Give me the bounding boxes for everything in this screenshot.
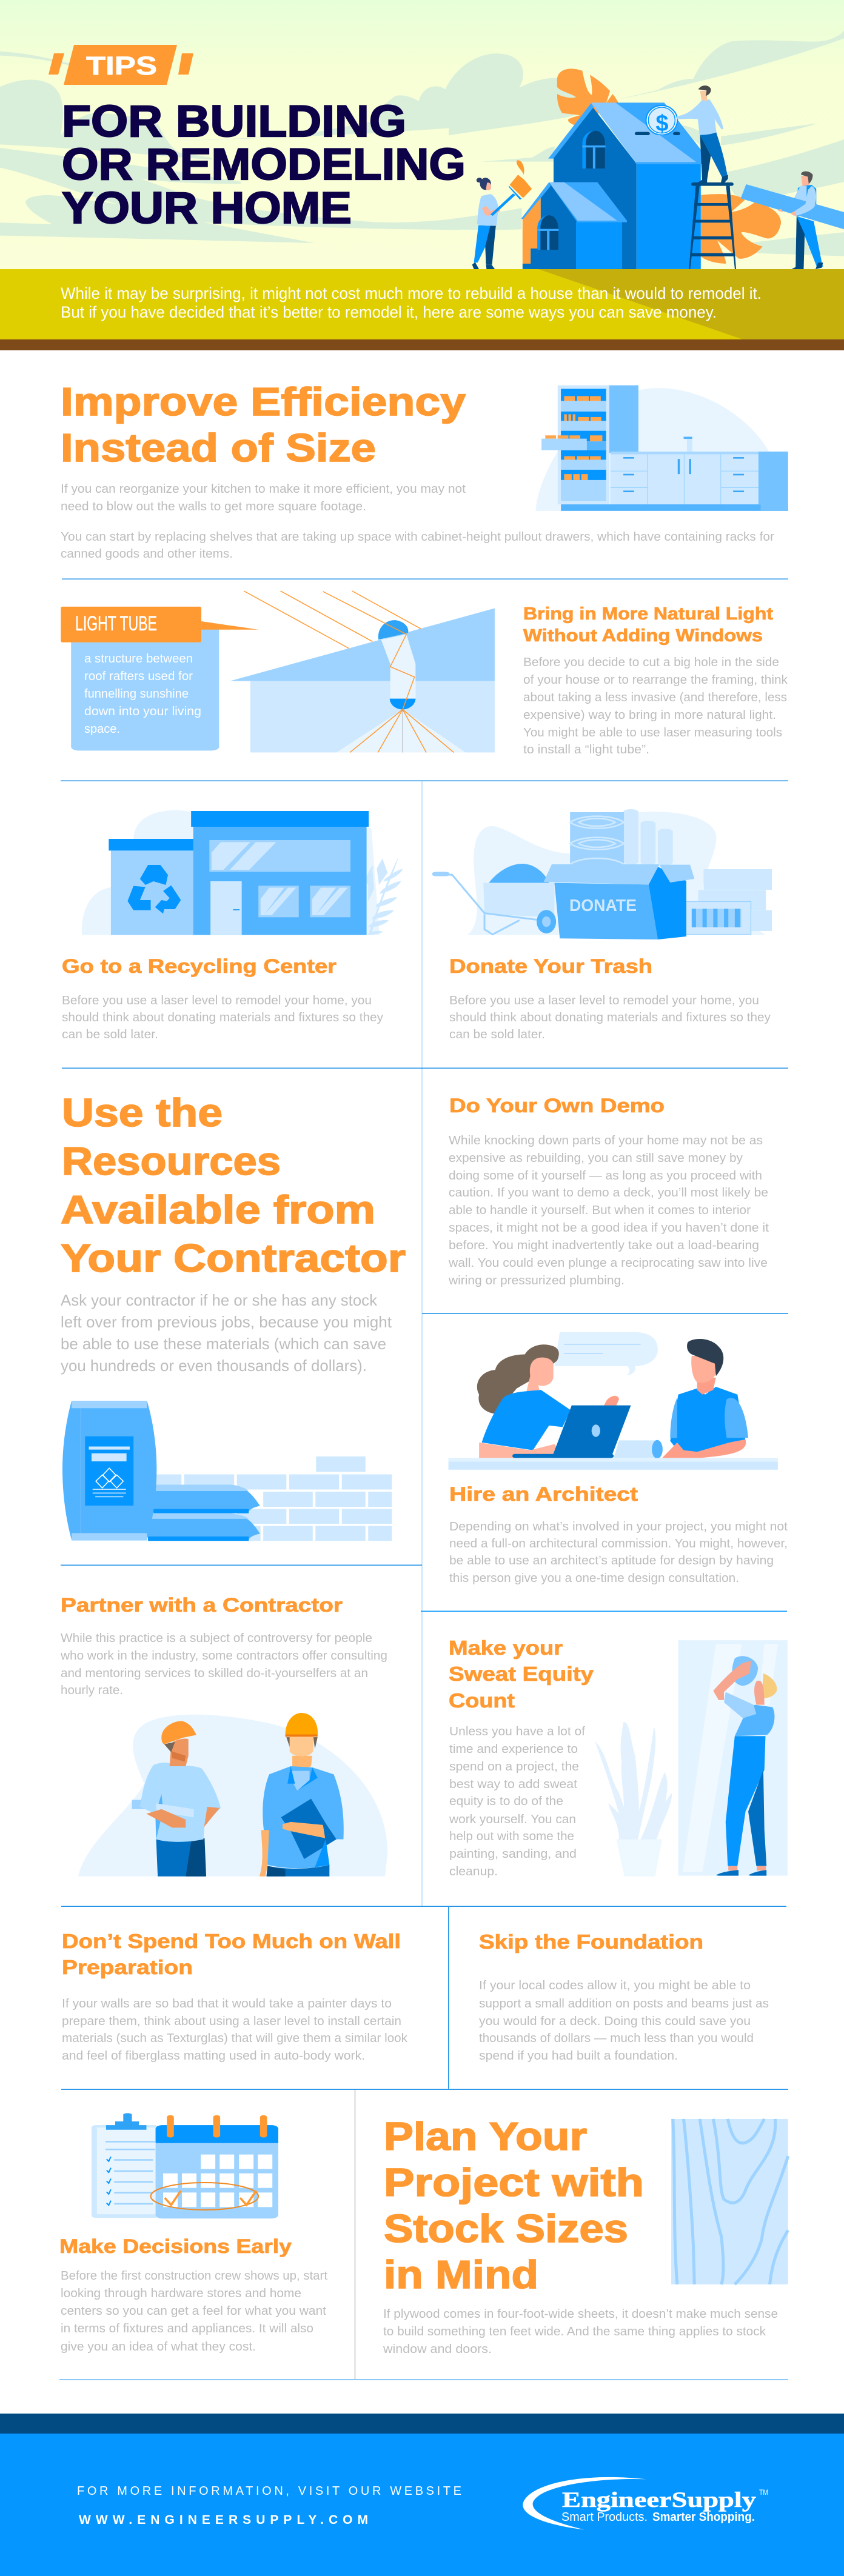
figure: man on ladder	[677, 85, 728, 182]
callout: light tube definition: LIGHT TUBE	[75, 612, 157, 635]
call to action text	[77, 2484, 461, 2527]
body text: wall. You could even plunge a reciprocating saw into live	[448, 1256, 768, 1270]
body text: need to blow out the walls to get more square footage.	[61, 500, 366, 513]
body text	[448, 1134, 769, 1287]
body text: need a full-on architectural commission. You might, however,	[449, 1537, 788, 1550]
panel: recycling center	[62, 810, 403, 1041]
logo: EngineerSupply	[523, 2477, 768, 2529]
callout: light tube definition: roof rafters used for	[84, 670, 193, 683]
intro text: While it may be surprising, it might not cost much more to rebuild a house than it would to remodel it.	[61, 284, 762, 302]
body text: you hundreds or even thousands of dollars).	[61, 1356, 367, 1375]
heading: Donate Your Trash	[449, 955, 652, 977]
heading	[523, 604, 773, 646]
body text	[61, 482, 774, 561]
illustration: kitchen	[535, 385, 788, 511]
body text: You can start by replacing shelves that are taking up space with cabinet-height pullout drawers, which have containing racks for	[61, 530, 774, 544]
body text	[523, 656, 788, 756]
body text	[449, 1725, 585, 1878]
heading: Hire an Architect	[449, 1483, 638, 1505]
heading: Make your	[449, 1637, 563, 1659]
icon: monstera leaves	[557, 68, 781, 264]
heading	[449, 1637, 594, 1712]
call to action text: WWW.ENGINEERSUPPLY.COM	[79, 2513, 368, 2527]
body text: spaces, it might not be a good idea if you haven’t done it	[449, 1221, 769, 1235]
body text: Ask your contractor if he or she has any stock	[61, 1291, 378, 1309]
intro text	[61, 284, 762, 321]
panel: light tube	[61, 591, 788, 756]
tips badge: TIPS	[86, 52, 157, 81]
body text: looking through hardware stores and home	[61, 2287, 301, 2300]
logo: EngineerSupply: Smart Products.	[561, 2511, 648, 2524]
panel: plan with stock sizes	[383, 2114, 788, 2356]
callout: light tube definition: a structure between	[84, 652, 193, 666]
heading	[61, 1090, 406, 1280]
body text: should think about donating materials and fixtures so they	[449, 1011, 771, 1024]
body text	[449, 1520, 788, 1585]
body text: can be sold later.	[449, 1028, 545, 1041]
figure: man carrying board	[740, 172, 844, 269]
body text: If you can reorganize your kitchen to make it more efficient, you may not	[61, 482, 466, 496]
body text: painting, sanding, and	[449, 1847, 577, 1861]
body text: can be sold later.	[62, 1028, 158, 1041]
heading: Available from	[61, 1187, 375, 1232]
body text: If your walls are so bad that it would take a painter days to	[62, 1997, 392, 2010]
panel: header	[0, 0, 844, 350]
logo: EngineerSupply: EngineerSupply	[562, 2488, 756, 2512]
heading: Go to a Recycling Center	[62, 955, 337, 977]
body text	[449, 994, 771, 1041]
heading: Instead of Size	[61, 425, 376, 470]
body text: centers so you can get a feel for what you want	[61, 2304, 326, 2318]
panel: sweat equity	[449, 1637, 788, 1878]
body text	[61, 1291, 392, 1375]
body text: help out with some the	[449, 1830, 574, 1843]
heading: Skip the Foundation	[479, 1930, 703, 1953]
body text: canned goods and other items.	[61, 547, 233, 561]
body text	[62, 994, 383, 1041]
body text: who work in the industry, some contractors offer consulting	[60, 1649, 387, 1663]
body text: be able to use an architect’s aptitude for design by having	[449, 1554, 774, 1567]
body text: work yourself. You can	[449, 1813, 576, 1826]
body text	[479, 1979, 769, 2063]
body text: If plywood comes in four-foot-wide sheets, it doesn’t make much sense	[383, 2307, 778, 2321]
title: FOR BUILDING	[62, 97, 406, 146]
logo: EngineerSupply: Smarter Shopping.	[652, 2511, 755, 2524]
panel: hire an architect	[449, 1332, 788, 1585]
heading: Bring in More Natural Light	[523, 604, 773, 624]
body text: be able to use these materials (which can save	[61, 1335, 386, 1353]
illustration: recycling building	[82, 810, 403, 935]
callout: light tube definition: down into your living	[84, 705, 201, 718]
body text: you would for a deck. Doing this could save you	[479, 2015, 751, 2028]
body text: spend if you had built a foundation.	[479, 2049, 678, 2063]
title	[62, 97, 466, 233]
heading: Count	[449, 1689, 515, 1712]
body text: If your local codes allow it, you might be able to	[479, 1979, 751, 1992]
panel: skip the foundation	[479, 1930, 769, 2063]
callout: light tube definition: space.	[84, 722, 120, 736]
heading	[62, 1930, 401, 1978]
body text: expensive) way to bring in more natural light.	[523, 709, 776, 722]
illustration: plant and woman painting	[595, 1640, 788, 1877]
body text: spend on a project, the	[449, 1760, 579, 1774]
body text: support a small addition on posts and beams just as	[479, 1997, 769, 2010]
heading	[61, 379, 466, 470]
body text: Depending on what’s involved in your project, you might not	[449, 1520, 788, 1533]
panel: wall preparation	[62, 1930, 408, 2063]
body text: able to handle it yourself. But when it comes to interior	[449, 1204, 751, 1217]
heading: in Mind	[384, 2252, 538, 2297]
body text	[60, 1632, 387, 1697]
heading: Make Decisions Early	[59, 2235, 292, 2257]
heading: Improve Efficiency	[61, 379, 466, 424]
body text: While knocking down parts of your home may not be as	[449, 1134, 763, 1147]
body text: about taking a less invasive (and therefore, less	[523, 691, 787, 704]
body text: and feel of fiberglass matting used in auto-body work.	[62, 2049, 365, 2063]
body text: materials (such as Texturglas) that will give them a similar look	[62, 2032, 408, 2045]
body text: thousands of dollars — much less than you would	[479, 2032, 754, 2045]
logo: EngineerSupply: TM	[759, 2488, 768, 2497]
body text: cleanup.	[449, 1865, 498, 1878]
illustration: materials and bricks	[62, 1401, 392, 1541]
panel: do your own demo	[448, 1095, 769, 1287]
heading: Do Your Own Demo	[449, 1095, 665, 1116]
body text: in terms of fixtures and appliances. It will also	[61, 2322, 313, 2335]
body text: doing some of it yourself — as long as you proceed with	[449, 1169, 762, 1183]
body text: expensive as rebuilding, you can still save money by	[449, 1152, 743, 1165]
body text: left over from previous jobs, because you might	[61, 1313, 392, 1331]
body text: should think about donating materials and fixtures so they	[62, 1011, 383, 1024]
heading: Partner with a Contractor	[61, 1594, 343, 1616]
heading: Sweat Equity	[449, 1663, 594, 1685]
body text: this person give you a one-time design consultation.	[449, 1572, 739, 1585]
title: OR REMODELING	[62, 140, 466, 189]
body text: window and doors.	[383, 2343, 492, 2356]
heading	[384, 2114, 644, 2297]
body text: before. You might inadvertently take out a load-bearing	[449, 1239, 759, 1252]
callout: light tube definition: funnelling sunshine	[84, 687, 189, 701]
heading: Stock Sizes	[384, 2206, 628, 2251]
body text	[383, 2307, 778, 2356]
body text: time and experience to	[449, 1743, 578, 1756]
illustration: two people at a table	[449, 1332, 778, 1470]
heading: Plan Your	[384, 2114, 587, 2158]
heading: Project with	[384, 2160, 644, 2204]
body text: You might be able to use laser measuring tools	[523, 726, 782, 739]
body text: best way to add sweat	[449, 1778, 577, 1791]
heading: Without Adding Windows	[523, 626, 763, 646]
body text: Before you use a laser level to remodel your home, you	[62, 994, 372, 1007]
illustration: donation box and wheelbarrow: DONATE	[569, 896, 637, 915]
body text: wiring or pressurized plumbing.	[448, 1274, 625, 1287]
background clouds	[0, 30, 844, 256]
icon: recycling symbol	[127, 865, 181, 913]
yellow intro band	[0, 269, 844, 350]
illustration: donation box and wheelbarrow	[432, 809, 772, 939]
heading: Preparation	[62, 1956, 193, 1978]
body text: of your house or to rearrange the framing, think	[523, 673, 788, 687]
heading: Your Contractor	[61, 1236, 406, 1280]
callout: light tube definition	[61, 607, 258, 750]
body text: Before you use a laser level to remodel your home, you	[449, 994, 759, 1007]
call to action text: FOR MORE INFORMATION, VISIT OUR WEBSITE	[77, 2484, 461, 2498]
body text: give you an idea of what they cost.	[61, 2340, 256, 2354]
footer	[0, 2414, 844, 2576]
body text: hourly rate.	[61, 1684, 123, 1697]
figure: woman with brush	[472, 160, 532, 269]
title: YOUR HOME	[62, 184, 352, 233]
body text: Unless you have a lot of	[449, 1725, 585, 1738]
intro text: But if you have decided that it’s better to remodel it, here are some ways you can save money.	[61, 303, 717, 321]
illustration: wood grain	[671, 2119, 788, 2284]
ladder	[689, 182, 736, 269]
body text: and mentoring services to skilled do-it-yourselfers at an	[61, 1667, 368, 1680]
panel: use the resources	[61, 1090, 406, 1541]
illustration: two contractors	[78, 1713, 387, 1877]
body text: caution. If you want to demo a deck, you’ll most likely be	[449, 1186, 768, 1200]
panel: partner with a contractor	[60, 1594, 387, 1877]
body text: prepare them, think about using a laser level to install certain	[62, 2015, 401, 2028]
body text: While this practice is a subject of controversy for people	[61, 1632, 372, 1645]
illustration: light tube diagram	[230, 591, 495, 752]
heading: Resources	[62, 1139, 281, 1183]
body text: equity is to do of the	[449, 1795, 563, 1808]
body text: to build something ten feet wide. And the same thing applies to stock	[383, 2325, 766, 2338]
panel: donate your trash	[432, 809, 772, 1041]
panel: make decisions early	[59, 2113, 327, 2354]
panel: improve efficiency	[61, 379, 788, 561]
illustration: house with workers: $	[655, 111, 669, 136]
house	[521, 102, 702, 269]
tips badge	[49, 45, 193, 85]
body text: Before you decide to cut a big hole in the side	[523, 656, 779, 669]
body text	[61, 2269, 327, 2354]
illustration: house with workers	[472, 68, 844, 269]
illustration: checklist and calendar	[92, 2113, 278, 2218]
body text	[62, 1997, 408, 2063]
heading: Don’t Spend Too Much on Wall	[62, 1930, 401, 1952]
divider	[62, 578, 788, 579]
body text: Before the first construction crew shows up, start	[61, 2269, 327, 2283]
body text: to install a “light tube”.	[523, 743, 649, 756]
heading: Use the	[62, 1090, 223, 1135]
